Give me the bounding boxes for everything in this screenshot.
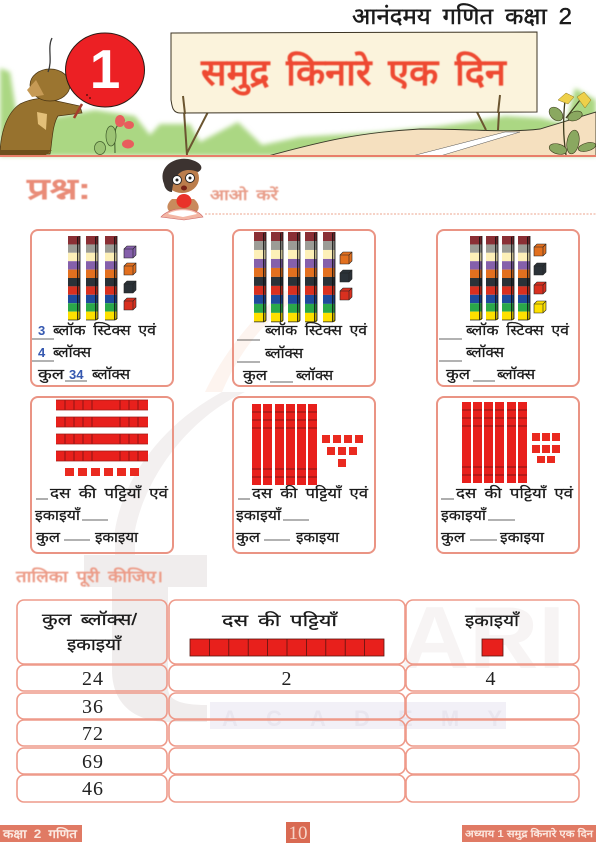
table values: 36 [82, 696, 104, 718]
footer: class label: कक्षा 2 गणित [2, 827, 78, 841]
block sticks [68, 236, 117, 320]
units [65, 468, 139, 476]
flower left [94, 115, 134, 154]
rows [17, 665, 579, 802]
panel: tens 3: कुल [441, 530, 466, 546]
panel: tens 1: कुल [36, 530, 61, 546]
panel: tens 1: इकाइयाँ [35, 507, 81, 524]
panel: tens 3 [437, 397, 579, 553]
loose blocks [124, 246, 136, 310]
panel: blocks 2: कुल [243, 368, 268, 384]
green bushes [0, 68, 596, 156]
panel: tens 1: इकाइया [95, 530, 138, 546]
ten strips [462, 402, 527, 483]
panel: tens 2: इकाइयाँ [236, 507, 282, 524]
column headers: कुल ब्लॉक्स/ [42, 610, 138, 630]
panel: tens 2 [233, 397, 375, 553]
units [322, 435, 363, 467]
table: इकाइयाँ [465, 611, 520, 630]
chapter number: 1 [90, 38, 120, 100]
loose blocks [534, 244, 546, 313]
panel: tens 1 [31, 397, 173, 553]
unit square [482, 639, 503, 656]
table values: 72 [82, 723, 104, 745]
table values: 69 [82, 751, 104, 773]
panel: blocks 34: 34 [69, 367, 84, 382]
panel: blocks 3: कुल [446, 367, 471, 383]
sign board [171, 32, 537, 113]
activity label: आओ करें [210, 186, 279, 204]
table: इकाइयाँ [67, 635, 122, 654]
sign posts [183, 95, 500, 155]
block sticks [470, 236, 530, 320]
panel: tens 3: इकाइया [500, 530, 544, 546]
question heading: प्रश्न: [26, 173, 91, 206]
banner scene [0, 32, 596, 156]
units [532, 433, 560, 463]
table values: 24 [82, 668, 104, 690]
road [268, 112, 596, 156]
panel: tens 2: इकाइया [296, 530, 339, 546]
lesson title: समुद्र किनारे एक दिन [200, 51, 507, 96]
panel: tens 2: दस की पट्टियाँ एवं [252, 485, 369, 502]
flower right [546, 92, 596, 156]
icon: reading child [161, 159, 203, 220]
panel: blocks 34: 4 [38, 345, 46, 360]
panel: blocks 3 [437, 230, 579, 386]
panel: blocks 2: ब्लॉक्स [296, 367, 333, 384]
panel: blocks 2: ब्लॉक स्टिक्स एवं [265, 322, 368, 339]
panel: blocks 34 [31, 230, 173, 386]
panel: blocks 34: 3 [38, 323, 45, 338]
footer: chapter label [462, 825, 596, 842]
watermark [84, 290, 565, 731]
ten strips [252, 404, 317, 485]
panel: blocks 3: ब्लॉक्स [497, 366, 535, 383]
chapter number [66, 33, 144, 118]
road stripes [412, 132, 520, 156]
table values: 2 [282, 668, 292, 690]
banner rule [0, 155, 596, 157]
panel: blocks 2: ब्लॉक्स [265, 345, 303, 362]
table heading: तालिका पूरी कीजिए। [15, 567, 163, 587]
panel: tens 2: कुल [236, 530, 261, 546]
book title: आनंदमय गणित कक्षा 2 [352, 3, 572, 29]
watermark: ARI [400, 588, 565, 687]
table: दस की पट्टियाँ [222, 611, 338, 630]
table values: 4 [486, 668, 496, 690]
footer: chapter label: अध्याय 1 समुद्र किनारे एक दिन [465, 827, 593, 840]
panel: blocks 2 [233, 230, 375, 386]
table values [82, 668, 496, 800]
panel: blocks 34: ब्लॉक्स [53, 344, 91, 361]
panel: blocks 34: ब्लॉक स्टिक्स एवं [53, 322, 157, 339]
footer: class label [0, 825, 82, 842]
panel: blocks 3: ब्लॉक्स [466, 344, 504, 361]
panel: blocks 34: ब्लॉक्स [92, 366, 130, 383]
block sticks [254, 232, 335, 322]
dotted rule [205, 213, 596, 215]
bear [0, 38, 82, 155]
panel: blocks 3: ब्लॉक स्टिक्स एवं [466, 322, 570, 339]
table [17, 600, 579, 802]
table values: 46 [82, 778, 104, 800]
header cells [17, 600, 579, 664]
panel: blocks 34: कुल [38, 367, 65, 383]
panel: tens 3: दस की पट्टियाँ एवं [456, 485, 574, 502]
ten strips [56, 400, 148, 461]
loose blocks [340, 252, 352, 300]
panel: tens 1: दस की पट्टियाँ एवं [50, 485, 169, 502]
ten strip [190, 639, 384, 656]
panel: tens 3: इकाइयाँ [441, 507, 487, 524]
watermark: ACADEMY [222, 706, 502, 731]
